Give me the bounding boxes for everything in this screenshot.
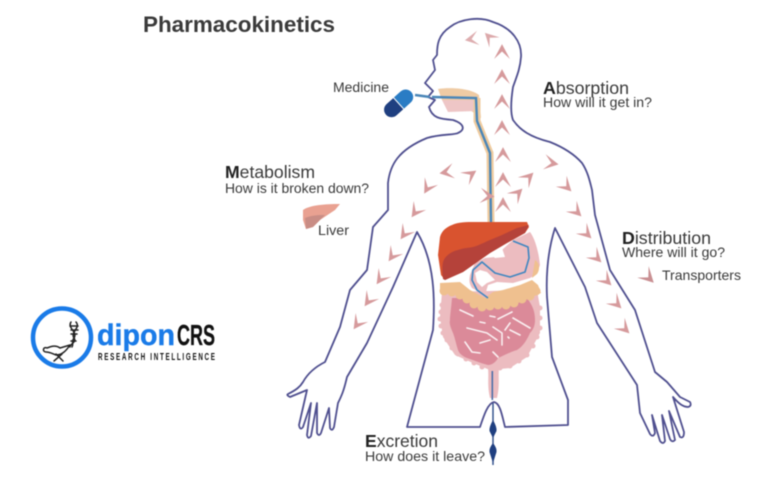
icon: medicine capsule xyxy=(381,86,416,120)
transporters legend: Transporters xyxy=(662,267,741,283)
liver label: Liver xyxy=(318,222,349,238)
absorption label: Absorption xyxy=(543,78,629,98)
left arm arrows xyxy=(347,163,455,334)
icon: liver xyxy=(303,204,340,229)
transporter arrows xyxy=(347,28,635,339)
logo xyxy=(33,308,215,366)
large intestine xyxy=(438,290,542,398)
throat and esophagus xyxy=(415,88,491,223)
liver dark lobe xyxy=(442,225,529,280)
logo wordmark: dipon xyxy=(97,319,175,352)
medicine label: Medicine xyxy=(333,79,389,95)
title: Pharmacokinetics xyxy=(143,12,335,37)
body outline xyxy=(287,19,691,443)
stomach openings xyxy=(475,270,495,287)
head arrows xyxy=(460,28,539,212)
absorption label: How will it get in? xyxy=(543,94,652,110)
distribution label xyxy=(622,228,725,260)
logo tagline: RESEARCH INTELLIGENCE xyxy=(98,350,215,362)
transporters legend xyxy=(637,266,741,288)
liver xyxy=(438,222,529,280)
stomach blue line xyxy=(472,241,529,298)
excretion label: How does it leave? xyxy=(365,448,485,464)
stomach xyxy=(469,232,540,295)
distribution label: Distribution xyxy=(622,228,711,248)
metabolism label: Metabolism xyxy=(225,162,315,182)
absorption label xyxy=(543,78,652,110)
fat band xyxy=(440,260,541,312)
excretion label xyxy=(365,431,485,464)
excretion label: Excretion xyxy=(365,431,438,451)
logo ring xyxy=(33,308,91,366)
digestive organs xyxy=(438,222,542,398)
rectum xyxy=(488,368,499,398)
icon: DNA helix and lamp xyxy=(43,322,78,361)
right arm arrows xyxy=(543,154,635,339)
logo: CRS xyxy=(177,320,215,352)
distribution label: Where will it go? xyxy=(622,244,725,260)
metabolism label: How is it broken down? xyxy=(225,180,369,196)
metabolism label xyxy=(225,162,369,196)
excretion arrow xyxy=(489,371,497,465)
intestine folds xyxy=(460,310,530,357)
small intestine xyxy=(450,298,535,365)
